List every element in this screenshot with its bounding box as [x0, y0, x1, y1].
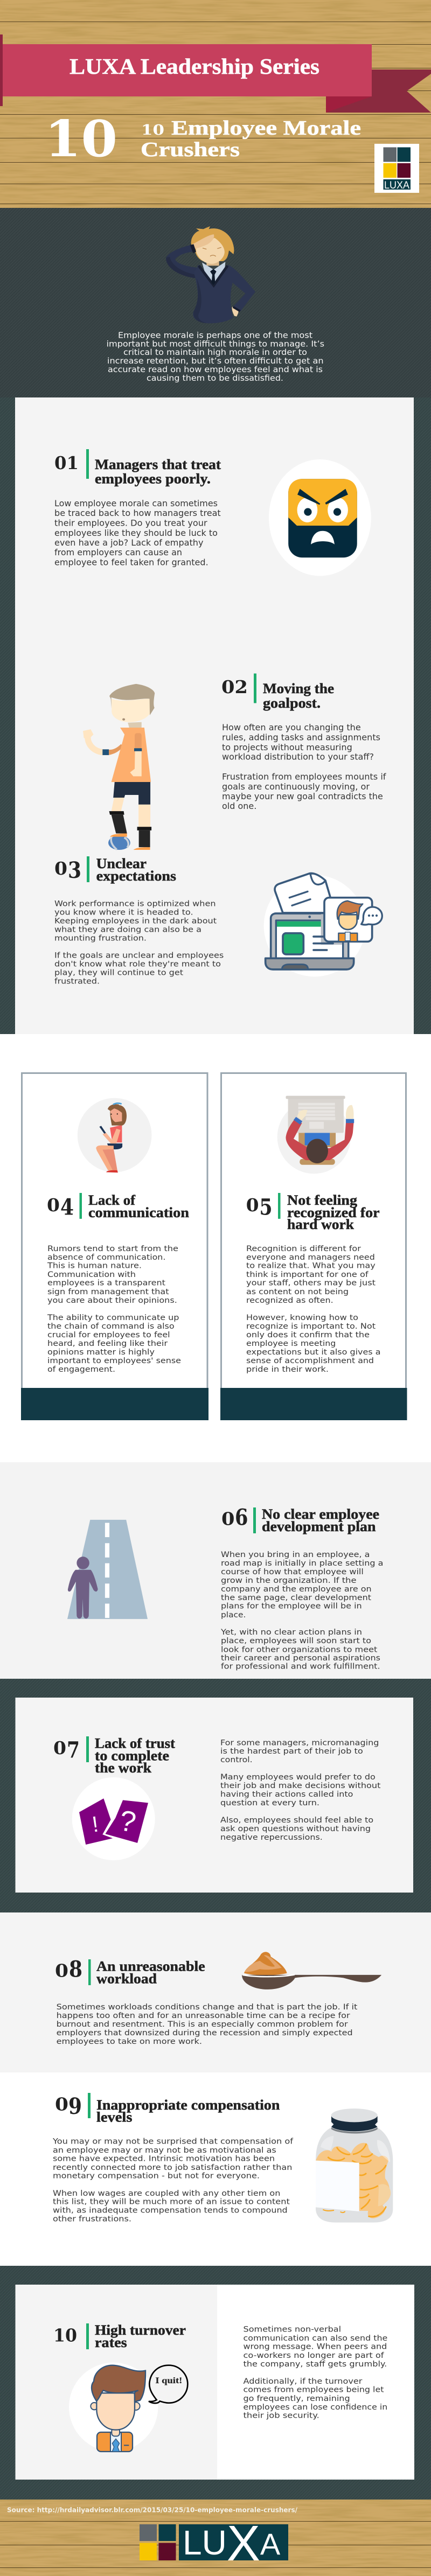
item 05 text: expectations but it also gives a: [246, 1348, 380, 1357]
item 04 text: you care about their opinions.: [47, 1296, 177, 1305]
logo: LUXA large: A: [260, 2527, 281, 2561]
item 06 heading: [262, 1506, 379, 1534]
item 05 text: pride in their work.: [246, 1365, 329, 1374]
item 04 text: This is human nature.: [47, 1261, 142, 1270]
item 04 text: crucial for employees to feel: [47, 1330, 170, 1339]
item 04 text: important to employees' sense: [47, 1356, 181, 1365]
ribbon banner: [0, 34, 431, 113]
item 03 heading: Unclear: [96, 855, 147, 871]
item 07 number: [53, 1737, 80, 1763]
item 03 number: 0: [54, 858, 67, 879]
icon: exclamation and question cards: ?: [117, 1805, 138, 1839]
item 06 heading: No clear employee: [262, 1506, 379, 1522]
icon: jar of coins: [316, 2109, 393, 2223]
icon: laptop with video chat: [264, 873, 382, 976]
item 09 text: You may or may not be surprised that compensation of: [52, 2137, 294, 2146]
item 05 text: your staff, others may be just: [246, 1279, 376, 1288]
icon: person at laptop from above: [277, 1096, 354, 1174]
item 03 text: [54, 899, 224, 986]
item 06 text: road map is initially in place setting a: [221, 1559, 384, 1568]
item 05 text: as content on not being: [246, 1287, 349, 1296]
item 09 text: monetary compensation - but not for everyone.: [53, 2172, 260, 2181]
item 06 text: grow in the organization. If the: [221, 1576, 357, 1585]
item 01 text: employee to feel taken for granted.: [54, 558, 208, 568]
item 06 number: 6: [235, 1505, 248, 1531]
item 07 text: their job and make decisions without: [220, 1781, 381, 1790]
item 03 heading: expectations: [96, 868, 176, 884]
card: item 04: [21, 1073, 208, 1420]
card: item 05: [220, 1073, 407, 1420]
item 03 text: play, they will continue to get: [54, 968, 183, 978]
item 01 text: be traced back to how managers treat: [54, 508, 221, 518]
item 02 text: [222, 723, 386, 811]
item 04 text: Communication with: [47, 1270, 136, 1279]
item 10 text: Sometimes non-verbal: [244, 2325, 341, 2334]
title: 10 Employee Morale Crushers: Crushers: [141, 138, 240, 161]
item 06 text: their career and personal aspirations: [221, 1653, 380, 1663]
item 06 accent bar: [253, 1507, 256, 1533]
item 01 accent bar: [86, 449, 89, 479]
item 01 text: from employers can cause an: [54, 548, 182, 557]
item 01 number: 01: [54, 452, 79, 473]
item 08 text: happens too often and for an unreasonable time can be a recipe for: [57, 2011, 350, 2020]
item 05 number: 0: [246, 1195, 259, 1216]
item 04 text: heard, and feeling like their: [47, 1339, 168, 1348]
item 04 heading: communication: [88, 1204, 189, 1220]
item 01 text: Low employee morale can sometimes: [54, 499, 218, 508]
item 05 text: recognized as often.: [246, 1296, 333, 1305]
item 02 text: to projects without measuring: [222, 743, 352, 752]
item 07 accent bar: [86, 1736, 89, 1762]
item 04 heading: [88, 1192, 189, 1220]
item 10 text: co-workers no longer are part of: [244, 2351, 384, 2360]
item 07 heading: Lack of trust: [95, 1735, 175, 1751]
item 03 text: frustrated.: [54, 977, 100, 986]
item 01 text: employees like they should be luck to: [54, 528, 218, 538]
item 03 text: you know where it is headed to.: [54, 908, 193, 917]
item 06 text: course of how that employee will: [221, 1567, 364, 1576]
item 04 heading: Lack of: [88, 1192, 136, 1208]
item 10 heading: High turnover: [95, 2322, 186, 2338]
item 06 text: the same page, clear development: [221, 1593, 371, 1602]
item 01 text: even have a job? Lack of empathy: [54, 538, 204, 548]
item 03 accent bar: [87, 856, 89, 882]
item 02 text: workload distribution to your staff?: [222, 752, 374, 762]
item 03 text: mounting frustration.: [54, 933, 147, 943]
item 09 text: other frustrations.: [53, 2215, 131, 2224]
title: 10 Employee Morale Crushers: 10: [141, 122, 164, 138]
item 01 text: [54, 499, 221, 568]
item 02 number: 02: [221, 676, 248, 697]
item 01 heading: Managers that treat: [95, 456, 221, 472]
item 02 heading: Moving the: [263, 680, 334, 696]
logo: LUXA small: [374, 144, 419, 193]
item 08 text: burnout and resentment. This is an especially common problem for: [57, 2020, 348, 2029]
item 06 text: company and the employee are on: [221, 1584, 372, 1594]
item 10 text: wrong message. When peers and: [244, 2342, 387, 2351]
section: item 10: [0, 2266, 431, 2500]
item 10 text: the company, staff gets grumbly.: [244, 2359, 387, 2369]
intro text: Employee morale is perhaps one of the most: [118, 331, 312, 340]
item 04 text: of engagement.: [47, 1365, 115, 1374]
item 07 heading: the work: [95, 1760, 151, 1776]
item 04 number: 0: [47, 1195, 60, 1216]
item 07 heading: [95, 1735, 175, 1776]
item 10 text: employees can lose confidence in: [244, 2403, 387, 2412]
item 06 text: Yet, with no clear action plans in: [220, 1628, 362, 1637]
item 03 text: Keeping employees in the dark about: [54, 916, 217, 925]
icon: man saying I quit: I quit!: [155, 2376, 182, 2385]
section: item 08: [0, 1912, 431, 2072]
item 05 heading: Not feeling: [287, 1192, 357, 1208]
item 08 text: employers that downsized during the recession and simply expected: [57, 2028, 353, 2037]
background: dark intro band: [0, 208, 431, 1034]
item 07 text: question at every turn.: [220, 1798, 319, 1807]
intro text: causing them to be dissatisfied.: [147, 373, 283, 383]
item 04 number: [47, 1195, 74, 1220]
item 09 text: some have expected. Intrinsic motivation has been: [53, 2154, 275, 2163]
item 07 text: Also, employees should feel able to: [220, 1816, 373, 1825]
item 05 text: Recognition is different for: [246, 1244, 361, 1253]
item 09 text: [52, 2137, 294, 2224]
item 06 text: for professional and work fulfillment.: [221, 1662, 380, 1671]
item 08 heading: workload: [96, 1971, 157, 1987]
item 04 accent bar: [80, 1193, 82, 1219]
item 04 text: absence of communication.: [47, 1253, 165, 1262]
item 03 text: Work performance is optimized when: [54, 899, 215, 909]
item 09 heading: levels: [96, 2109, 132, 2125]
item 10 text: [244, 2325, 387, 2420]
intro text: accurate read on how employees feel and what is: [108, 365, 323, 374]
item 07 heading: to complete: [95, 1747, 169, 1763]
item 02 accent bar: [254, 673, 256, 703]
item 07 number: 7: [67, 1737, 80, 1763]
item 07 text: having their actions called into: [220, 1790, 353, 1799]
item 05 heading: recognized for: [287, 1204, 380, 1220]
big number 10: 10: [45, 109, 117, 168]
logo: LUXA large: X: [227, 2515, 260, 2571]
item 08 accent bar: [88, 1959, 91, 1985]
item 10 heading: [95, 2322, 186, 2350]
icon: man saying I quit: [69, 2363, 187, 2452]
item 07 text: negative repercussions.: [220, 1833, 323, 1842]
item 09 text: recently connected more to job satisfaction rather than: [53, 2163, 292, 2172]
icon: road and person: [67, 1520, 148, 1619]
item 02 text: Frustration from employees mounts if: [222, 772, 386, 781]
item 04 text: opinions matter is highly: [47, 1348, 155, 1357]
item 10 text: go frequently, remaining: [244, 2394, 350, 2403]
item 02 text: old one.: [222, 801, 256, 811]
item 08 number: 8: [69, 1956, 82, 1982]
item 01 text: their employees. Do you treat your: [54, 518, 207, 528]
section: item 07: [0, 1679, 431, 1912]
item 07 text: is the hardest part of their job to: [220, 1747, 363, 1756]
item 06 text: place, employees will soon start to: [221, 1636, 371, 1645]
item 03 text: If the goals are unclear and employees: [54, 951, 224, 960]
icon: spoon of peanut butter: [242, 1952, 381, 1989]
item 10 accent bar: [86, 2323, 89, 2349]
item 04 number: 4: [60, 1195, 74, 1220]
item 02 heading: [263, 680, 334, 711]
item 07 text: Many employees would prefer to do: [220, 1772, 376, 1782]
icon: stressed employee: [166, 226, 255, 323]
item 06 heading: development plan: [262, 1518, 376, 1534]
item 07 text: For some managers, micromanaging: [220, 1738, 379, 1747]
item 05 text: However, knowing how to: [246, 1313, 358, 1322]
section: item 09: [0, 2072, 431, 2266]
item 08 text: employees to take on more work.: [57, 2037, 202, 2046]
item 03 heading: [96, 855, 176, 884]
item 08 text: Sometimes workloads conditions change and that is part the job. If it: [57, 2002, 358, 2012]
item 09 number: 0: [55, 2094, 68, 2115]
item 06 text: When you bring in an employee, a: [221, 1550, 370, 1559]
item 10 text: comes from employees being let: [244, 2385, 384, 2395]
item 05 heading: [287, 1192, 380, 1232]
item 04 text: [47, 1244, 181, 1374]
item 05 text: everyone and managers need: [246, 1253, 375, 1262]
intro text: increase retention, but it’s often difficult to get an: [107, 356, 323, 366]
item 06 text: [220, 1550, 384, 1671]
item 07 text: control.: [220, 1755, 253, 1764]
item 07 number: 0: [53, 1737, 66, 1758]
item 07 text: [220, 1738, 381, 1842]
item 08 number: 0: [55, 1960, 68, 1981]
item 10 number: 10: [53, 2325, 77, 2346]
background: wood header: [0, 0, 431, 208]
item 08 heading: An unreasonable: [96, 1958, 205, 1974]
item 09 text: with, as inadequate compensation tends to compound: [53, 2205, 288, 2215]
item 05 text: employee is meeting: [246, 1339, 336, 1348]
icon: exclamation and question cards: !: [91, 1811, 100, 1837]
item 10 text: their job security.: [244, 2411, 319, 2420]
item 04 text: sign from management that: [47, 1287, 169, 1296]
item 09 text: When low wages are coupled with any other tiem on: [53, 2189, 280, 2198]
item 10 heading: rates: [95, 2334, 127, 2350]
logo: LUXA large: LU: [183, 2523, 227, 2562]
item 09 number: 9: [68, 2093, 82, 2119]
item 06 text: place.: [221, 1610, 246, 1619]
item 05 number: 5: [260, 1195, 273, 1220]
title: 10 Employee Morale Crushers: Employee Morale: [171, 117, 361, 139]
logo: LUXA small: LUXA: [384, 180, 409, 191]
item 05 text: only does it confirm that the: [246, 1330, 370, 1339]
item 05 number: [246, 1195, 273, 1220]
item 05 text: recognize is important to. Not: [246, 1322, 376, 1331]
item 03 number: [54, 857, 81, 883]
item 02 heading: goalpost.: [263, 695, 321, 711]
item 01 heading: [95, 456, 221, 487]
section: item 06: [0, 1462, 431, 1679]
item 01 heading: employees poorly.: [95, 471, 211, 487]
item 04 text: The ability to communicate up: [47, 1313, 179, 1322]
item 06 number: [221, 1505, 248, 1531]
icon: exclamation and question cards: [72, 1777, 155, 1860]
item 04 text: Rumors tend to start from the: [47, 1244, 178, 1253]
item 04 text: employees is a transparent: [47, 1279, 165, 1288]
item 06 number: 0: [221, 1509, 235, 1530]
intro text: critical to maintain high morale in order to: [123, 347, 307, 357]
item 08 heading: [96, 1958, 205, 1987]
item 09 heading: Inappropriate compensation: [96, 2097, 280, 2113]
item 03 text: what they are doing can also be a: [54, 925, 201, 934]
logo: LUXA large: [140, 2515, 288, 2571]
item 02 text: rules, adding tasks and assignments: [222, 732, 380, 742]
item 07 text: ask open questions without having: [220, 1824, 371, 1833]
intro text: [107, 331, 324, 383]
item 05 text: sense of accomplishment and: [246, 1356, 374, 1365]
item 02 text: goals are continuously moving, or: [222, 782, 370, 792]
item 05 accent bar: [278, 1193, 280, 1219]
item 08 text: [57, 2002, 358, 2046]
item 09 number: [55, 2093, 82, 2119]
item 03 text: don't know what role they're meant to: [54, 959, 221, 968]
icon: angry face: [269, 459, 371, 576]
item 06 text: plans for the employee will be in: [221, 1602, 362, 1611]
intro text: important but most difficult things to manage. It’s: [107, 339, 324, 348]
item 10 text: communication can also send the: [244, 2334, 387, 2343]
panel: items 01-03: [15, 397, 414, 1034]
item 09 text: this list, they will be much more of an issue to content: [53, 2197, 290, 2207]
item 09 text: an employee may or may not be as motivational as: [53, 2146, 276, 2155]
background: wood footer: [0, 2500, 431, 2576]
item 10 text: Additionally, if the turnover: [244, 2377, 362, 2386]
item 08 number: [55, 1956, 82, 1982]
item 09 heading: [96, 2097, 280, 2125]
item 06 text: look for other organizations to meet: [221, 1645, 378, 1654]
icon: football player: [83, 684, 155, 850]
title: series name: LUXA Leadership Series: [69, 54, 319, 79]
title: 10 Employee Morale Crushers: [141, 117, 361, 161]
item 03 number: 3: [68, 857, 81, 883]
item 02 text: maybe your new goal contradicts the: [222, 792, 383, 801]
item 05 text: to realize that. What you may: [246, 1261, 376, 1270]
item 04 text: the chain of command is also: [47, 1322, 175, 1331]
icon: woman with phone: [78, 1098, 152, 1172]
item 05 heading: hard work: [287, 1216, 354, 1232]
source line: Source: http://hrdailyadvisor.blr.com/2015/03/25/10-employee-morale-crushers/: [7, 2506, 297, 2514]
item 05 text: [246, 1244, 380, 1374]
item 09 accent bar: [88, 2093, 91, 2118]
item 02 text: How often are you changing the: [222, 723, 361, 732]
item 05 text: think is important for one of: [246, 1270, 369, 1279]
